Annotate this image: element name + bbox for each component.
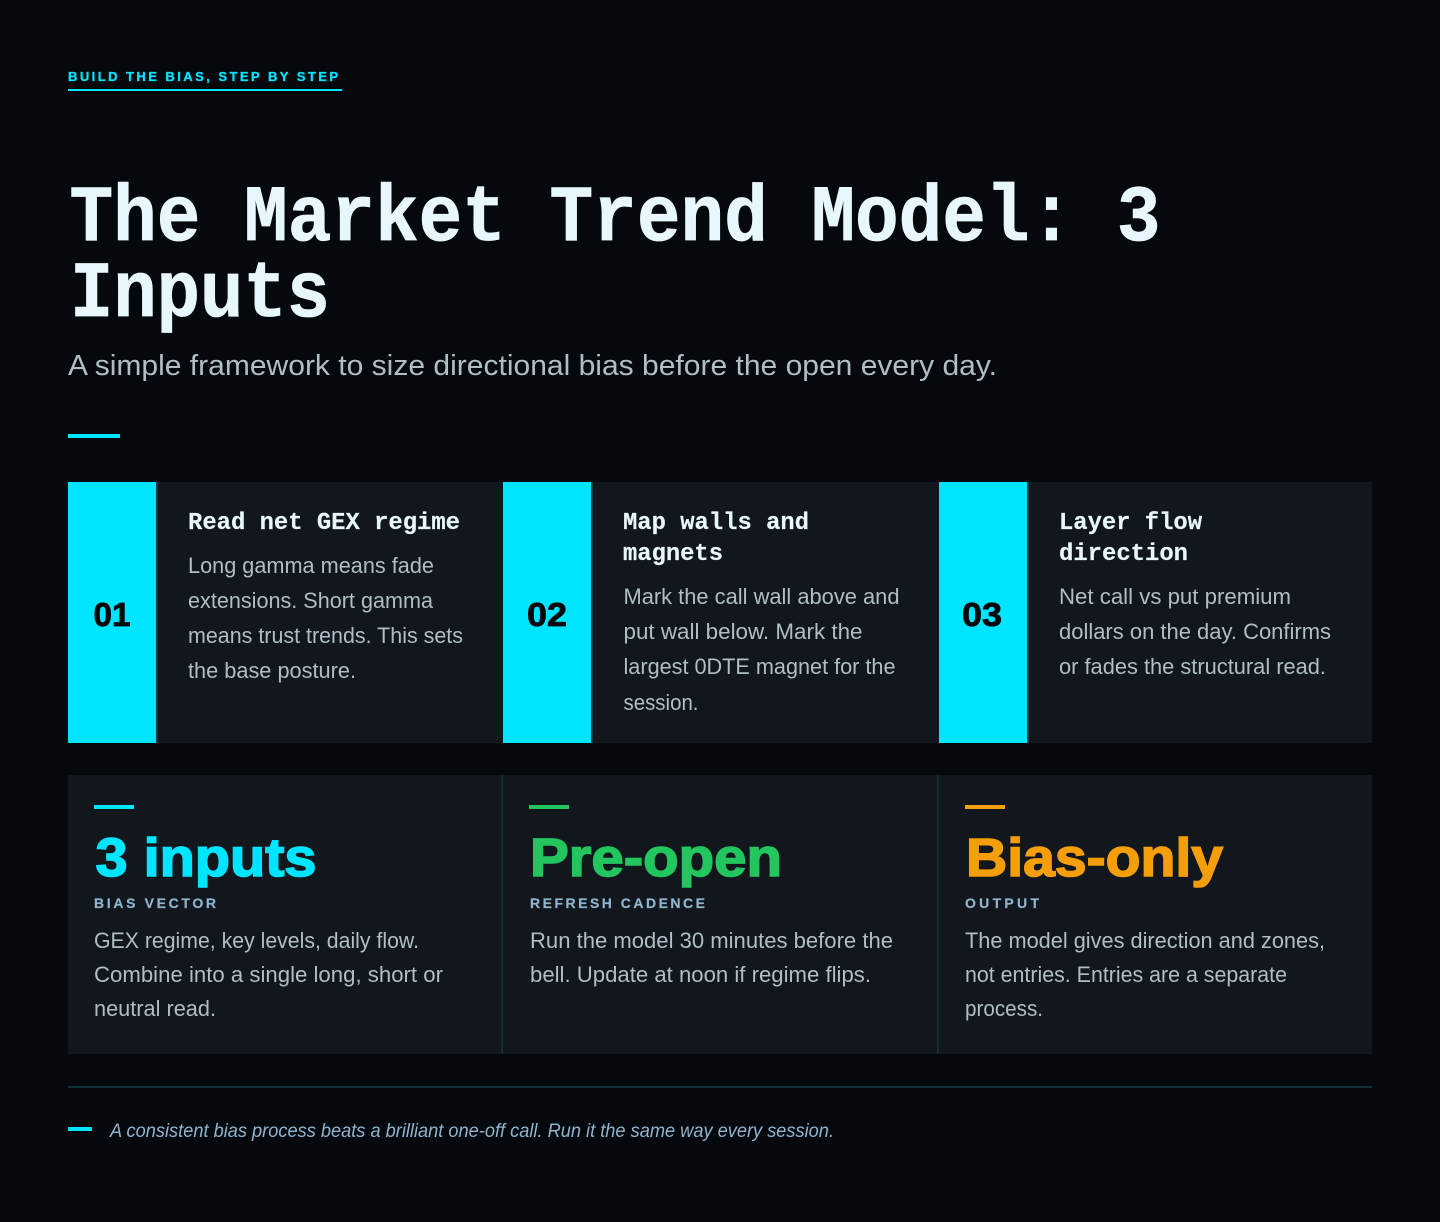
step 3 body: or fades the structural read.: [1059, 654, 1326, 679]
step 1 number block: 01: [94, 596, 130, 633]
stat: 3 inputs: BIAS VECTOR: [94, 895, 216, 911]
step 1 body: means trust trends. This sets: [188, 623, 463, 648]
step 3 heading: [1059, 510, 1203, 568]
stat: 3 inputs: [94, 805, 443, 1021]
stat: bias-only: Bias-only: [966, 828, 1223, 888]
stat: bias-only: OUTPUT: [965, 895, 1039, 911]
step 2 heading: Map walls and: [623, 510, 809, 537]
step 1 heading: Read net GEX regime: [188, 510, 460, 537]
step 3 number block: 03: [962, 596, 1002, 633]
stat: 3 inputs: GEX regime, key levels, daily flow.: [94, 928, 419, 953]
step 3 heading: direction: [1059, 541, 1188, 568]
subtitle: A simple framework to size directional bias before the open every day.: [68, 350, 997, 382]
step 3 card: [939, 482, 1331, 743]
footer note: A consistent bias process beats a brilliant one-off call. Run it the same way every session.: [109, 1121, 834, 1142]
stat: bias-only: [965, 805, 1325, 1021]
stat: bias-only: The model gives direction and zones,: [965, 928, 1325, 953]
step 1 number block: [68, 482, 158, 743]
stat: pre-open: Run the model 30 minutes before the: [530, 928, 893, 953]
stat: 3 inputs: neutral read.: [94, 996, 216, 1021]
step 3 body: [1059, 584, 1331, 679]
accent rule: [68, 434, 120, 438]
stat: 3 inputs: Combine into a single long, short or: [94, 962, 443, 987]
stat: 3 inputs: 3 inputs: [96, 828, 316, 888]
title: Inputs: [70, 250, 330, 341]
step 2 body: [624, 584, 900, 715]
step 2 body: Mark the call wall above and: [624, 584, 900, 609]
step 2 card: [503, 482, 900, 743]
step 2 body: largest 0DTE magnet for the: [624, 654, 896, 679]
eyebrow label: BUILD THE BIAS, STEP BY STEP: [68, 69, 338, 84]
title: The Market Trend Model: 3: [70, 174, 1160, 265]
step 2 heading: [623, 510, 809, 568]
step 2 heading: magnets: [623, 541, 723, 568]
step 3 number block: [939, 482, 1029, 743]
step 1 body: extensions. Short gamma: [188, 588, 434, 613]
stat: pre-open: REFRESH CADENCE: [530, 895, 705, 911]
step 2 body: session.: [624, 690, 698, 715]
step 1 card: [68, 482, 463, 743]
panel: step cards: [68, 482, 1372, 743]
stat: bias-only: process.: [965, 996, 1043, 1021]
step 2 number block: 02: [527, 596, 567, 633]
step 2 number block: [503, 482, 593, 743]
step 1 body: Long gamma means fade: [188, 553, 434, 578]
step 3 body: dollars on the day. Confirms: [1059, 619, 1331, 644]
title: [70, 174, 1160, 341]
stat: pre-open: bell. Update at noon if regime flips.: [530, 962, 871, 987]
step 1 body: [188, 553, 463, 683]
step 3 heading: Layer flow: [1059, 510, 1203, 537]
panel: stats: [68, 775, 1372, 1054]
stat: pre-open: Pre-open: [530, 828, 782, 888]
stat: bias-only: not entries. Entries are a separate: [965, 962, 1287, 987]
stat: pre-open: [529, 805, 893, 987]
step 3 body: Net call vs put premium: [1059, 584, 1291, 609]
step 2 body: put wall below. Mark the: [624, 619, 862, 644]
step 1 body: the base posture.: [188, 658, 356, 683]
